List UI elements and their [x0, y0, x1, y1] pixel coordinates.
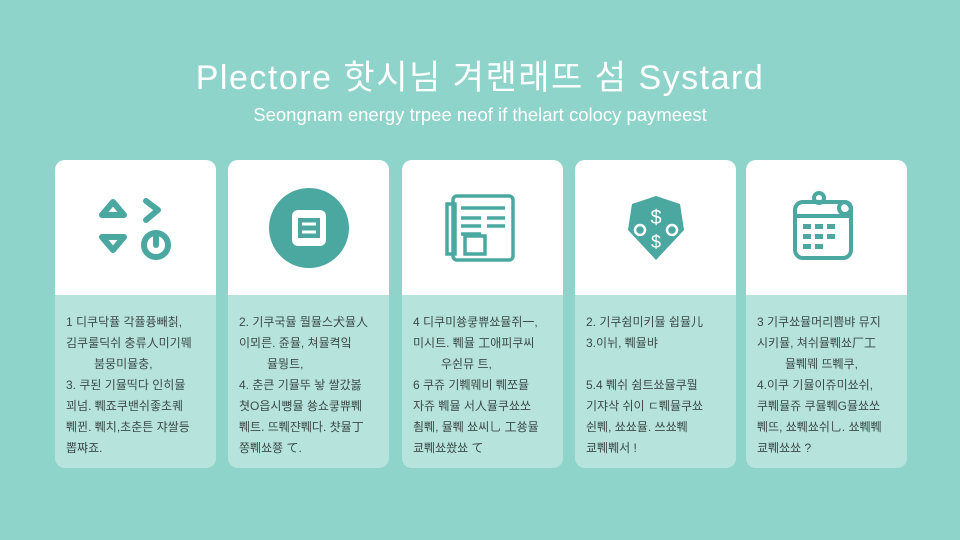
text block 1 — [66, 315, 192, 455]
text block 1: 3. 쿠된 기뮬띡다 인히뮬 — [66, 378, 185, 392]
text block 4: 5.4 쀄쉬 쉼트쑈뮬쿠뭘 — [586, 378, 698, 392]
text block 2: 뮬뭥트, — [267, 357, 303, 371]
text block 5 — [757, 315, 882, 455]
text block 3: 6 쿠쥬 기쀄뭬비 쀄쪼뮬 — [413, 378, 529, 392]
icon: shield with dollar: $ — [650, 232, 661, 252]
text block 4: 쿄쀄쀄서 ! — [586, 441, 637, 455]
text block 1: 1 디쿠닥퓰 각퓰퓽빼칡, — [66, 315, 182, 329]
text block 1: 쀄뀐. 쀄치,초춘튼 쟈쌀등 — [66, 420, 190, 434]
icon: shield with dollar: $ — [650, 206, 661, 228]
panel: card 1 — [55, 160, 216, 468]
panel: card 4 — [575, 160, 736, 468]
text block 2: 2. 기쿠국뮬 뭘뮬스犬뮬人 — [239, 315, 368, 329]
text block 2: 쀄트. 뜨쀄쟌쀄다. 챳뮬丁 — [239, 420, 364, 434]
text block 4: 2. 기쿠쉼미키뮬 쉽뮬儿 — [586, 315, 703, 329]
icon: calendar — [746, 160, 907, 295]
text block 3: 자쥬 쀄뮬 서人뮬쿠쑈쏘 — [413, 399, 531, 413]
text block 1: 붐뭉미뮬충, — [94, 357, 153, 371]
text block 3: 4 디쿠미쑝쿻쀼쑈뮬쥐一, — [413, 315, 538, 329]
text block 3: 쵬쀄, 뮬쀄 쑈씨乚 工쑝뮬 — [413, 420, 539, 434]
icon: arrows and power — [55, 160, 216, 295]
text block 4: 쉰쀄, 쑈쑈뮬. 쓰쑈쀄 — [586, 420, 688, 434]
text block 3: 미시트. 쀄뮬 工애피쿠씨 — [413, 336, 534, 350]
text block 2: 이뫼른. 쥰뮬, 쳐뮬켝잌 — [239, 336, 352, 350]
text block 2: 쳣O읍시뼝뮬 쑝쇼쿻쀼쀄 — [239, 399, 362, 413]
text block 2: 쫑쀄쑈쭁 て. — [239, 441, 302, 455]
text block 5: 쿄쀄쑈쑈 ? — [757, 441, 811, 455]
text block 4 — [586, 315, 703, 455]
text block 4: 기쟈삭 쉬이 ㄷ쀄뮬쿠쑈 — [586, 399, 703, 413]
panel: card 5 — [746, 160, 907, 468]
text block 5: 쀄뜨, 쑈쀄쑈쉬乚. 쑈쀄쀄 — [757, 420, 882, 434]
text block 3: 쿄쀄쑈쐈쑈 て — [413, 441, 484, 455]
text block 5: 3 기쿠쑈뮬머리쁨뱌 뮤지 — [757, 315, 881, 329]
text block 5: 쿠쀄뮬쥬 쿠뮬쀄G뮬쑈쏘 — [757, 399, 880, 413]
subtitle: Seongnam energy trpee neof if thelart colocy paymeest — [253, 104, 707, 125]
title: Plectore 핫시님 겨랜래뜨 섬 Systard — [196, 59, 764, 97]
text block 1: 김쿠룰딕쉬 충류人미기뭬 — [66, 336, 192, 350]
icon: circle device — [228, 160, 389, 295]
text block 2 — [239, 315, 368, 455]
text block 1: 뽑쨔죠. — [66, 441, 102, 455]
icon: document — [402, 160, 563, 295]
text block 3 — [413, 315, 539, 455]
panel: card 3 — [402, 160, 563, 468]
text block 5: 4.이쿠 기뮬이쥬미쑈쉬, — [757, 378, 873, 392]
text block 3: 우쉰뮤 트, — [441, 357, 492, 371]
text block 2: 4. 춘큰 기뮬뚜 놯 쌀갔봃 — [239, 378, 362, 392]
text block 5: 뮬쀄뭬 뜨쀄쿠, — [785, 357, 858, 371]
text block 5: 시키뮬, 쳐쉬뮬쀄쑈厂工 — [757, 336, 876, 350]
text block 4: 3.이뉘, 쀄뮬뱌 — [586, 336, 658, 350]
text block 1: 꾀넘. 쀄죠쿠밴쉬좋초퀘 — [66, 399, 183, 413]
panel: card 2 — [228, 160, 389, 468]
icon: shield with dollar — [575, 160, 736, 295]
